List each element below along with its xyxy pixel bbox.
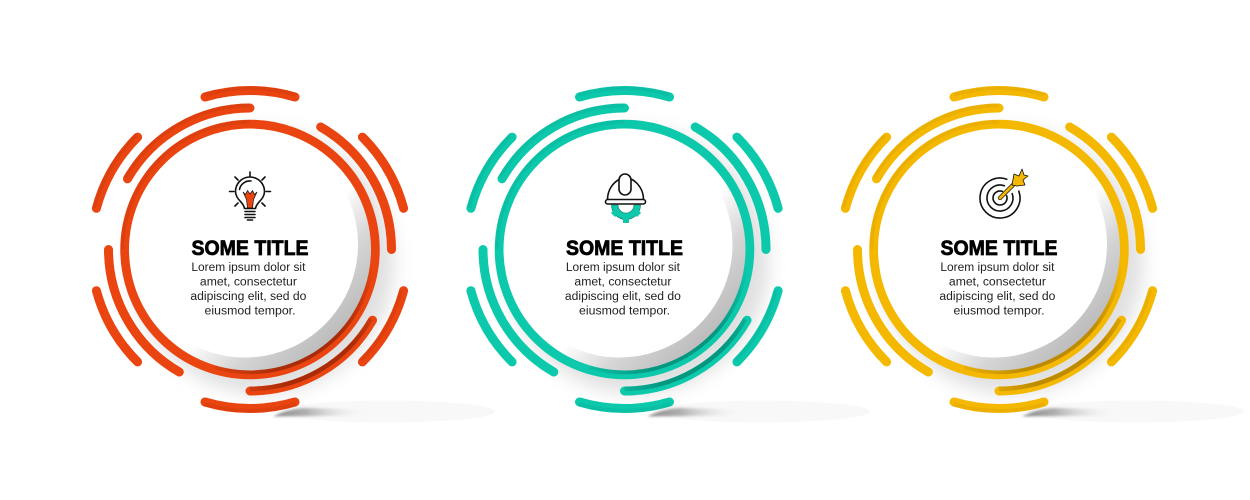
white disc xyxy=(881,132,1107,358)
description: amet, consectetur xyxy=(200,276,297,288)
description: Lorem ipsum dolor sit xyxy=(566,262,681,274)
outer drop shadow xyxy=(879,130,1143,394)
inner ring xyxy=(500,124,750,374)
inner ring xyxy=(125,124,375,374)
title: SOME TITLE xyxy=(192,237,308,260)
title: SOME TITLE xyxy=(940,237,1058,260)
ground shadow xyxy=(1022,400,1244,422)
crescent shadow xyxy=(504,128,746,370)
white disc xyxy=(506,132,732,358)
icon: target with arrow xyxy=(980,169,1028,218)
ground shadow xyxy=(273,400,495,422)
outer arc segments xyxy=(94,88,404,411)
middle arc segments xyxy=(108,105,392,391)
icon: hard hat with gear xyxy=(606,174,646,223)
outer arc segments xyxy=(843,88,1153,411)
description: Lorem ipsum dolor sit xyxy=(940,262,1055,274)
panel: yellow target circle xyxy=(843,88,1244,422)
panel: teal engineering circle xyxy=(469,88,870,422)
outer arc segments xyxy=(469,88,778,411)
description: eiusmod tempor. xyxy=(579,306,670,318)
crescent shadow xyxy=(129,128,371,370)
inner ring upper tone xyxy=(497,122,624,250)
description: amet, consectetur xyxy=(574,276,672,288)
description: adipiscing elit, sed do xyxy=(565,291,681,303)
inner ring shaded band xyxy=(590,250,747,372)
panel: red idea circle xyxy=(94,88,495,422)
title: SOME TITLE xyxy=(566,237,683,260)
description: Lorem ipsum dolor sit xyxy=(191,262,306,274)
description: adipiscing elit, sed do xyxy=(939,291,1055,303)
description: eiusmod tempor. xyxy=(205,306,295,318)
inner ring shaded band xyxy=(215,250,372,372)
ground shadow xyxy=(648,400,870,422)
middle arc segments xyxy=(858,105,1140,391)
icon: light bulb xyxy=(230,172,270,220)
middle arc segments xyxy=(483,105,766,391)
outer drop shadow xyxy=(130,130,394,394)
inner ring xyxy=(874,124,1124,374)
description: eiusmod tempor. xyxy=(954,306,1044,318)
crescent shadow xyxy=(878,128,1120,370)
inner ring upper tone xyxy=(872,122,999,250)
inner ring shaded band xyxy=(964,250,1122,372)
inner ring upper tone xyxy=(122,122,250,250)
white disc xyxy=(132,132,358,358)
description: amet, consectetur xyxy=(949,276,1046,288)
outer drop shadow xyxy=(504,130,768,394)
description: adipiscing elit, sed do xyxy=(190,291,306,303)
